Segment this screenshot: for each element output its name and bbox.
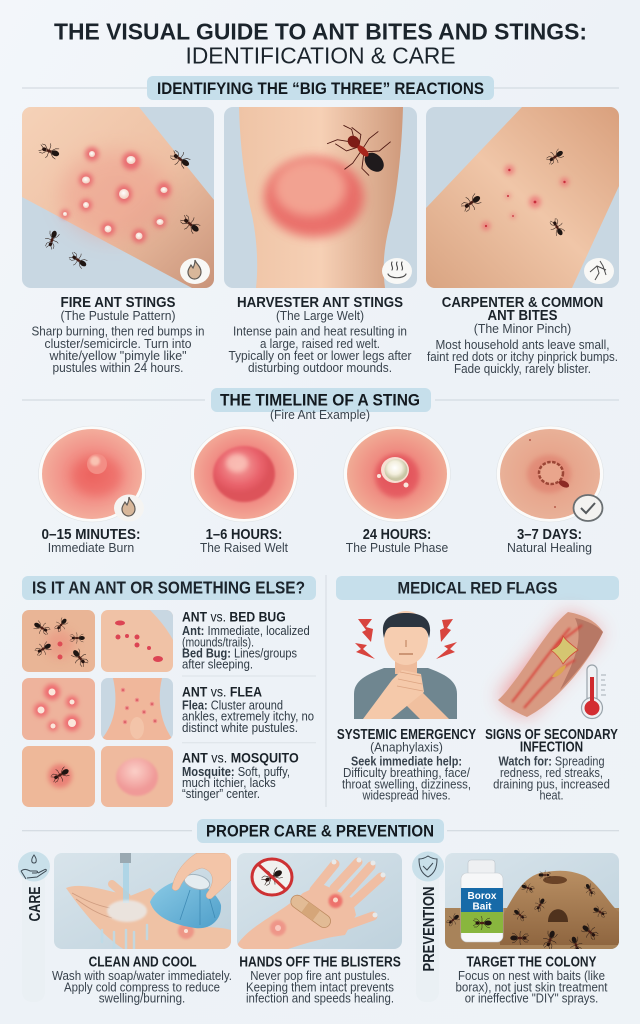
text: harvester ant stings xyxy=(228,294,412,375)
text: clean and cool xyxy=(52,954,232,1006)
text: carpenter and common ant bites xyxy=(427,294,618,376)
text: ant vs bed bug: Bed Bug: Lines/groups xyxy=(182,647,297,661)
heading: medical red flags: MEDICAL RED FLAGS xyxy=(398,580,558,598)
heading: timeline of a sting: THE TIMELINE OF A STING xyxy=(220,392,420,410)
thumbnail: ant on skin xyxy=(22,746,95,807)
text: fire ant stings: cluster/semicircle. Turn into xyxy=(44,337,192,351)
panel: harvester ant sting photo xyxy=(224,107,417,288)
icon: thermometer xyxy=(582,665,606,718)
heading: timeline of a sting: (Fire Ant Example) xyxy=(270,408,370,422)
title: IDENTIFICATION & CARE xyxy=(186,42,456,68)
heading: proper care and prevention xyxy=(197,819,444,843)
panel: is it an ant or something else xyxy=(22,576,316,807)
text: hands off the blisters: HANDS OFF THE BLISTERS xyxy=(239,954,401,971)
text: fire ant stings xyxy=(32,294,205,375)
text: harvester ant stings: disturbing outdoor mounds. xyxy=(248,361,392,375)
text: ant vs bed bug: ANT vs. BED BUG xyxy=(182,609,286,625)
text: ant vs flea: Flea: Cluster around xyxy=(182,698,283,712)
thumbnail: flea bites on ankle xyxy=(101,678,173,740)
text: signs of secondary infection: INFECTION xyxy=(520,739,583,756)
thumbnail: ants on skin xyxy=(22,610,95,672)
text: signs of secondary infection: redness, red streaks, xyxy=(500,766,603,780)
text: systemic emergency xyxy=(337,726,476,803)
text: carpenter and common ant bites: (The Minor Pinch) xyxy=(474,322,571,336)
illustration: infected arm with thermometer xyxy=(498,612,606,718)
text: ant vs flea xyxy=(182,683,314,735)
timeline stage: 3-7 days: Natural Healing xyxy=(507,541,592,555)
text: clean and cool: Wash with soap/water immediately. xyxy=(52,969,232,983)
thumbnail: bed bug bites xyxy=(101,610,173,672)
timeline stage: 1-6 hours xyxy=(190,426,298,555)
text: ant vs mosquito: Mosquite: Soft, puffy, xyxy=(182,765,290,779)
timeline stage: 0-15 minutes xyxy=(38,426,146,555)
timeline stage: 24 hours: The Pustule Phase xyxy=(346,541,448,555)
text: ant vs flea: distinct white pustules. xyxy=(182,721,298,735)
text: systemic emergency: throat swelling, dizziness, xyxy=(342,777,471,791)
text: harvester ant stings: HARVESTER ANT STINGS xyxy=(237,294,403,311)
icon: flame badge xyxy=(114,494,144,522)
text: ant vs mosquito xyxy=(182,750,299,801)
text: fire ant stings: pustules within 24 hours. xyxy=(52,361,184,375)
text: clean and cool: swelling/burning. xyxy=(99,992,185,1006)
thumbnail: mosquito welt xyxy=(101,746,173,807)
text: ant vs bed bug: after sleeping. xyxy=(182,658,253,672)
text: fire ant stings: FIRE ANT STINGS xyxy=(60,294,176,311)
text: signs of secondary infection: heat. xyxy=(540,789,564,803)
text: systemic emergency: Difficulty breathing, face/ xyxy=(343,766,470,780)
text: target the colony: Focus on nest with baits (like xyxy=(458,969,605,983)
title xyxy=(54,18,587,68)
heading: identifying the big three: IDENTIFYING THE “BIG THREE” REACTIONS xyxy=(157,80,484,98)
text: target the colony: TARGET THE COLONY xyxy=(466,954,596,971)
text: hands off the blisters: Never pop fire ant pustules. xyxy=(250,969,390,983)
text: ant vs mosquito: “stinger” center. xyxy=(182,787,260,801)
panel: fire ant stings photo xyxy=(22,107,214,288)
icon: heat waves badge xyxy=(382,258,412,284)
text: ant vs flea: ANT vs. FLEA xyxy=(182,683,262,699)
text: systemic emergency: SYSTEMIC EMERGENCY xyxy=(337,726,476,743)
text: clean and cool: CLEAN AND COOL xyxy=(89,954,197,971)
text: harvester ant stings: (The Large Welt) xyxy=(276,309,364,323)
panel: carpenter ant bites photo xyxy=(426,107,619,288)
text: fire ant stings: (The Pustule Pattern) xyxy=(60,309,176,323)
text: ant vs bed bug: Ant: Immediate, localized xyxy=(182,624,310,638)
icon: borax bait bottle: Bait xyxy=(473,902,492,912)
text: ant vs mosquito: much itchier, lacks xyxy=(182,776,276,790)
text: systemic emergency: widespread hives. xyxy=(362,789,450,803)
text: signs of secondary infection xyxy=(485,726,618,803)
text: target the colony: or ineffective "DIY" sprays. xyxy=(465,992,598,1006)
icon: borax bait bottle: Borox xyxy=(468,891,497,902)
text: carpenter and common ant bites: faint red dots or itchy pinprick bumps. xyxy=(427,350,618,364)
text: fire ant stings: Sharp burning, then red bumps in xyxy=(32,324,205,338)
text: systemic emergency: Seek immediate help: xyxy=(351,755,462,769)
text: harvester ant stings: Typically on feet or lower legs after xyxy=(228,349,412,363)
text: carpenter and common ant bites: Most household ants leave small, xyxy=(436,338,610,352)
timeline stage: 24 hours xyxy=(344,426,450,555)
text: harvester ant stings: Intense pain and heat resulting in xyxy=(233,324,407,338)
text: target the colony xyxy=(456,954,608,1006)
heading: medical red flags xyxy=(336,576,619,600)
side label: care: CARE xyxy=(27,886,44,922)
timeline stage: 3-7 days xyxy=(496,426,604,555)
icon: person with throat swelling xyxy=(354,611,457,719)
text: fire ant stings: white/yellow "pimyle like" xyxy=(49,349,186,363)
text: ant vs mosquito: ANT vs. MOSQUITO xyxy=(182,750,299,766)
timeline stage: 1-6 hours: The Raised Welt xyxy=(200,541,289,555)
icon: borax bait bottle xyxy=(461,860,503,942)
text: signs of secondary infection: draining pus, increased xyxy=(493,777,610,791)
panel: clean and cool illustration xyxy=(54,853,231,950)
panel: medical red flags xyxy=(336,576,619,803)
timeline stage: 3-7 days: 3–7 DAYS: xyxy=(517,526,582,543)
side label: care xyxy=(18,852,50,1002)
text: systemic emergency: (Anaphylaxis) xyxy=(370,741,443,755)
text: ant vs bed bug: (mounds/trails). xyxy=(182,635,254,649)
panel: target the colony illustration xyxy=(444,853,619,955)
side label: prevention xyxy=(412,852,444,1002)
text: target the colony: borax), not just skin treatment xyxy=(456,981,608,995)
panel: hands off the blisters illustration xyxy=(237,853,402,950)
icon: ant pinch badge xyxy=(584,258,614,284)
heading: proper care and prevention: PROPER CARE & PREVENTION xyxy=(206,822,434,840)
text: hands off the blisters: Keeping them intact prevents xyxy=(246,981,394,995)
timeline stage: 24 hours: 24 HOURS: xyxy=(363,526,431,543)
text: hands off the blisters: infection and speeds healing. xyxy=(246,992,394,1006)
text: hands off the blisters xyxy=(239,954,401,1006)
text: harvester ant stings: a large, raised red welt. xyxy=(260,337,380,351)
icon: flame badge xyxy=(180,258,210,284)
icon: check badge xyxy=(574,495,602,521)
text: carpenter and common ant bites: Fade quickly, rarely blister. xyxy=(454,362,591,376)
timeline stage: 0-15 minutes: 0–15 MINUTES: xyxy=(42,526,140,543)
heading: timeline of a sting xyxy=(211,388,431,422)
text: carpenter and common ant bites: ANT BITES xyxy=(488,307,558,324)
side label: prevention: PREVENTION xyxy=(421,886,438,972)
title: THE VISUAL GUIDE TO ANT BITES AND STINGS: xyxy=(54,18,587,44)
timeline stage: 0-15 minutes: Immediate Burn xyxy=(48,541,134,555)
text: signs of secondary infection: Watch for: Spreading xyxy=(498,755,605,769)
thumbnail: ant pustules xyxy=(22,678,95,740)
timeline stage: 1-6 hours: 1–6 HOURS: xyxy=(206,526,282,543)
text: ant vs flea: ankles, extremely itchy, no xyxy=(182,710,314,724)
text: ant vs bed bug xyxy=(182,609,310,672)
heading: ant or something else: IS IT AN ANT OR SOMETHING ELSE? xyxy=(32,578,305,598)
text: clean and cool: Apply cold compress to reduce xyxy=(64,981,220,995)
text: carpenter and common ant bites: CARPENTER & COMMON xyxy=(442,294,603,311)
